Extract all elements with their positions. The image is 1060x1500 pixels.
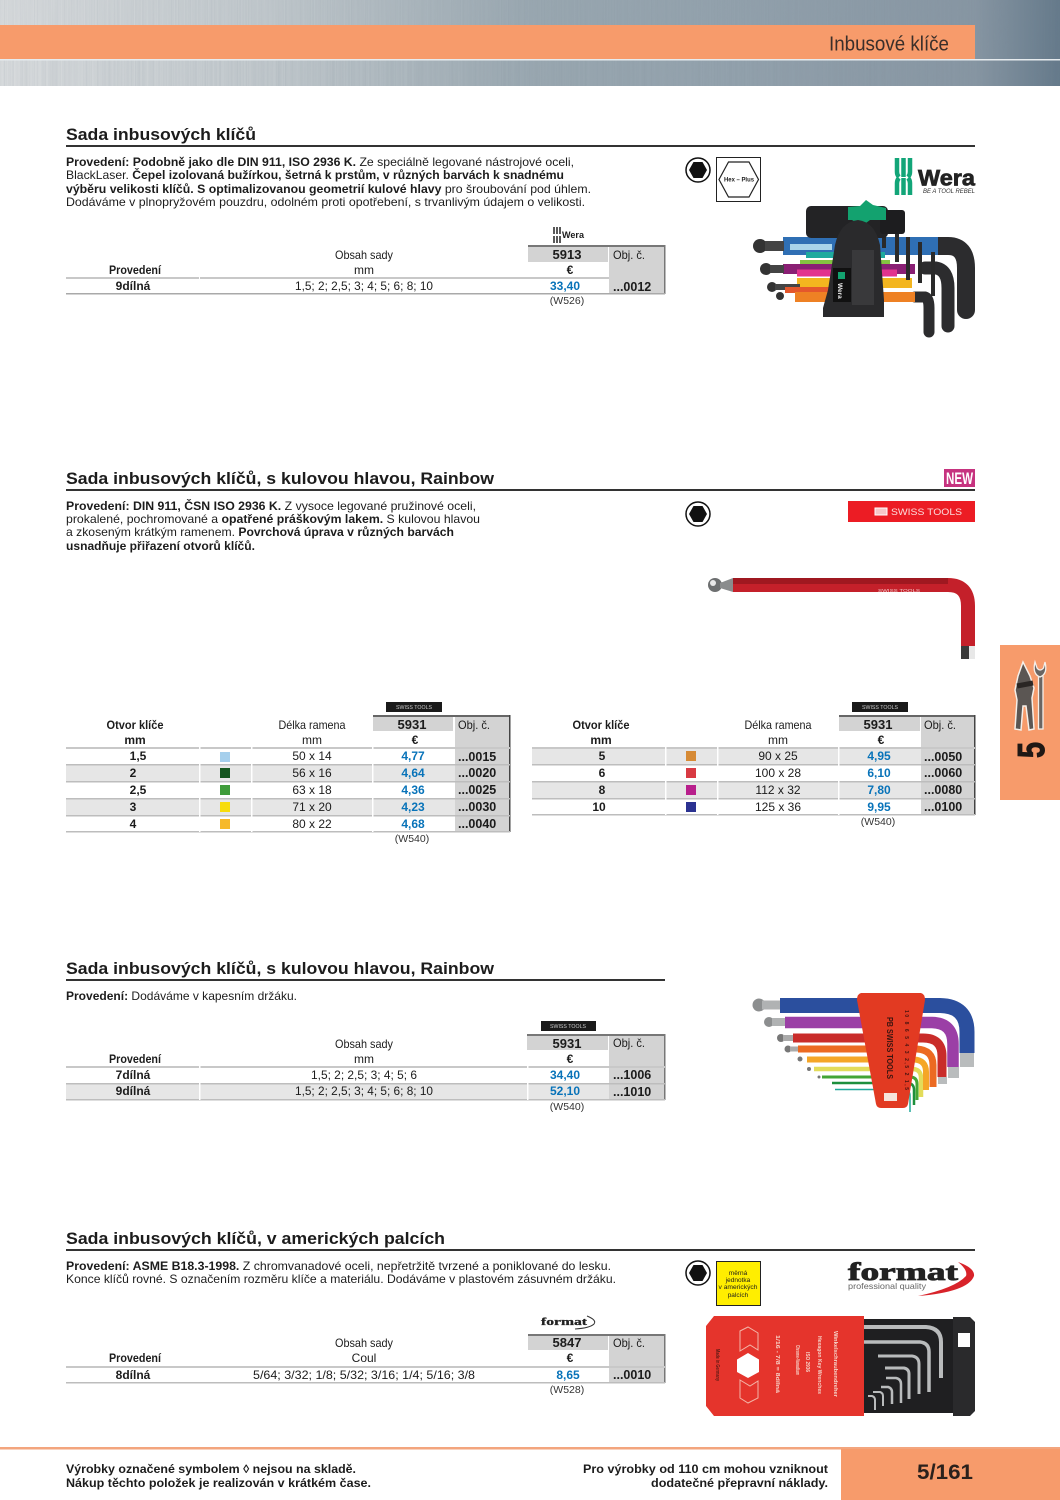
row 8 xyxy=(599,783,962,797)
row 6: 100 x 28 xyxy=(755,766,801,780)
row 9dílná xyxy=(116,1084,651,1099)
row 5: 4,95 xyxy=(867,749,891,763)
product table 3 xyxy=(66,1021,666,1113)
product image: Wera key set: Wera xyxy=(836,283,843,299)
row 7dílná: 1,5; 2; 2,5; 3; 4; 5; 6 xyxy=(311,1068,417,1082)
product table 4 xyxy=(66,1316,666,1396)
row 7dílná: 7dílná xyxy=(116,1068,151,1082)
section 2: kulová hlava Rainbow xyxy=(66,469,976,845)
product table 2 right: mm xyxy=(768,733,788,747)
section 1: Sada inbusových klíčů xyxy=(66,125,976,332)
description: Dodáváme v plnopryžovém pouzdru, odolném proti opotřebení, s trvanlivým údajem o velikosti. xyxy=(66,195,585,209)
icon: american inches note: palcích xyxy=(728,1292,749,1299)
row 8: 112 x 32 xyxy=(755,783,801,797)
product image: rainbow key set in holder: PB SWISS TOOLS xyxy=(885,1017,895,1079)
logo: PB Swiss Tools: SWISS TOOLS xyxy=(891,507,962,518)
product table 4: Obsah sady xyxy=(335,1336,393,1350)
description: Provedení: DIN 911, ČSN ISO 2936 K. Z vysoce legované pružinové oceli, xyxy=(66,498,476,513)
row 2,5: 4,36 xyxy=(401,783,425,797)
icon: american inches note: jednotka xyxy=(725,1277,751,1284)
product table 2 left: € xyxy=(412,733,419,747)
row 3: 71 x 20 xyxy=(292,800,332,814)
row 4: 4 xyxy=(130,817,137,831)
footer note right xyxy=(583,1462,828,1490)
row 3 xyxy=(130,800,496,814)
heading: Sada inbusových klíčů, v amerických palcích xyxy=(66,1229,445,1248)
row 6: 6,10 xyxy=(867,766,891,780)
row 7dílná: 34,40 xyxy=(550,1068,580,1082)
description: BlackLaser. Čepel izolovaná bužírkou, šetrná k prstům, v různých barvách k snadnému xyxy=(66,167,564,182)
row 7dílná: ...1006 xyxy=(613,1068,651,1082)
product table 1: Obj. č. xyxy=(613,248,645,262)
product table 2 left: Délka ramena xyxy=(278,718,346,732)
row 10: 10 xyxy=(592,800,606,814)
product image: red ball-end key xyxy=(708,578,975,659)
footer note right: Pro výrobky od 110 cm mohou vzniknout xyxy=(583,1462,828,1476)
product table 1: 33,40 xyxy=(550,279,580,293)
product table 1: € xyxy=(567,263,574,277)
product table 4: Coul xyxy=(352,1351,376,1365)
description: a zkoseným krátkým ramenem. Povrchová úprava v různých barvách xyxy=(66,525,454,539)
row 9dílná: 9dílná xyxy=(116,1084,151,1098)
row 2 xyxy=(130,766,496,780)
product image: format key set: Hexagon Key Wrenches xyxy=(816,1336,822,1394)
product table 3: Provedení xyxy=(109,1052,162,1066)
product image: rainbow key set in holder: 10 8 6 5 4 3 2,5 2 1,5 xyxy=(903,1010,909,1090)
description: Provedení: ASME B18.3-1998. Z chromvanadové oceli, nepřetržitě tvrzené a poniklované do lesku. xyxy=(66,1259,611,1273)
product table 3: Obsah sady xyxy=(335,1037,393,1051)
header title: Inbusové klíče xyxy=(829,34,949,56)
row 4: ...0040 xyxy=(458,817,496,831)
product image: red ball-end key: SWISS TOOLS xyxy=(878,588,920,593)
product table 4: ...0010 xyxy=(613,1368,651,1382)
row 2: ...0020 xyxy=(458,766,496,780)
row 2: 2 xyxy=(130,766,137,780)
product table 1: mm xyxy=(354,263,374,277)
product image: format key set: ISO 2936 xyxy=(804,1352,810,1372)
product table 4: 5/64; 3/32; 1/8; 5/32; 3/16; 1/4; 5/16; 3/8 xyxy=(253,1368,475,1382)
footer note right: dodatečné přepravní náklady. xyxy=(651,1476,828,1490)
icon: hexagon socket xyxy=(686,158,710,182)
logo: PB small xyxy=(852,702,908,712)
logo: format: professional quality xyxy=(848,1281,927,1291)
row 6: ...0060 xyxy=(924,766,962,780)
icon: hexagon socket xyxy=(686,1261,710,1285)
product image: format key set: Winkelschraubendreher xyxy=(832,1331,838,1397)
row 8: 8 xyxy=(599,783,606,797)
product table 3: € xyxy=(567,1052,574,1066)
row 10: ...0100 xyxy=(924,800,962,814)
row 1,5: 1,5 xyxy=(130,749,147,763)
product table 2 left xyxy=(66,702,510,845)
description xyxy=(66,1259,616,1286)
product table 2 right: € xyxy=(878,733,885,747)
header band xyxy=(0,0,1060,86)
logo: PB small: SWISS TOOLS xyxy=(396,705,433,711)
product table 4: Provedení xyxy=(109,1351,162,1365)
row 2,5: ...0025 xyxy=(458,783,496,797)
heading: Sada inbusových klíčů, s kulovou hlavou, Rainbow xyxy=(66,469,495,488)
row 2: 56 x 16 xyxy=(292,766,332,780)
row 8: 7,80 xyxy=(867,783,891,797)
row 2,5 xyxy=(130,783,496,797)
product table 2 right: (W540) xyxy=(861,816,895,828)
product table 2 right: Otvor klíče xyxy=(572,718,630,732)
product table 1: Obsah sady xyxy=(335,248,393,262)
footer note left: Výrobky označené symbolem ◊ nejsou na skladě. xyxy=(66,1462,356,1476)
section 3: kapesní držák xyxy=(66,959,974,1113)
product table 3: 5931 xyxy=(553,1036,581,1051)
footer note left xyxy=(66,1462,371,1490)
logo: Wera small: Wera xyxy=(562,230,585,240)
large keys xyxy=(937,246,966,310)
logo: Wera small xyxy=(554,227,585,243)
product table 3: mm xyxy=(354,1052,374,1066)
row 5: 90 x 25 xyxy=(758,749,798,763)
product table 2 left: mm xyxy=(124,733,146,747)
row 8: ...0080 xyxy=(924,783,962,797)
product image: Wera key set xyxy=(753,200,966,332)
product table 3: Obj. č. xyxy=(613,1036,645,1050)
description: usnadňuje přiřazení otvorů klíčů. xyxy=(66,539,255,553)
product table 4: € xyxy=(567,1351,574,1365)
row 6: 6 xyxy=(599,766,606,780)
product image: format key set: Chrome-Vanadium xyxy=(794,1345,800,1375)
product table 1: 5913 xyxy=(553,247,581,262)
product table 4: (W528) xyxy=(550,1384,584,1396)
icon: american inches note: měrná xyxy=(729,1270,748,1277)
logo: Wera: Wera xyxy=(918,166,976,190)
page number: 5/161 xyxy=(917,1461,973,1484)
icon: Hex-Plus xyxy=(716,158,760,202)
logo: format small xyxy=(541,1316,595,1329)
holder xyxy=(857,993,925,1108)
description: Konce klíčů rovné. S označením rozměru klíče a materiálu. Dodáváme v plastovém zásuvném držáku. xyxy=(66,1272,616,1286)
icon: pliers and wrench xyxy=(1015,662,1046,730)
row 4 xyxy=(130,817,496,831)
logo: PB small xyxy=(541,1021,596,1031)
row 3: 3 xyxy=(130,800,137,814)
product table 4: 5847 xyxy=(553,1335,581,1350)
row 10 xyxy=(592,800,962,814)
product table 4: Obj. č. xyxy=(613,1336,645,1350)
heading: Sada inbusových klíčů xyxy=(66,125,256,144)
row 9dílná: 52,10 xyxy=(550,1084,580,1098)
row 9dílná: ...1010 xyxy=(613,1085,651,1099)
product table 2 left: mm xyxy=(302,733,322,747)
description: Provedení: Podobně jako dle DIN 911, ISO 2936 K. Ze speciálně legované nástrojové oceli, xyxy=(66,155,574,169)
row 10: 9,95 xyxy=(867,800,891,814)
product table 2 left: Obj. č. xyxy=(458,718,490,732)
logo: PB small: SWISS TOOLS xyxy=(550,1024,587,1030)
product table 2 left: (W540) xyxy=(395,833,429,845)
footer xyxy=(0,1447,1060,1500)
row 7dílná xyxy=(116,1068,651,1082)
product image: rainbow key set in holder xyxy=(752,993,974,1112)
row 10: 125 x 36 xyxy=(755,800,801,814)
badge: NEW xyxy=(944,469,975,488)
product table 2 right: mm xyxy=(590,733,612,747)
product table 1: (W526) xyxy=(550,295,584,307)
row 2,5: 2,5 xyxy=(130,783,147,797)
logo: Wera: BE A TOOL REBEL xyxy=(923,189,975,195)
logo: Wera xyxy=(897,158,976,195)
icon: american inches note: v amerických xyxy=(718,1284,758,1291)
row 1,5: 50 x 14 xyxy=(292,749,332,763)
row 1,5: 4,77 xyxy=(401,749,425,763)
product table 4: 8,65 xyxy=(556,1368,580,1382)
description: prokalené, pochromované a opatřené práškovým lakem. S kulovou hlavou xyxy=(66,512,480,526)
product table 2 right: Délka ramena xyxy=(744,718,812,732)
row 5 xyxy=(599,749,962,764)
icon: american inches note xyxy=(716,1262,760,1306)
row 9dílná: 1,5; 2; 2,5; 3; 4; 5; 6; 8; 10 xyxy=(295,1084,433,1098)
product table 3: (W540) xyxy=(550,1101,584,1113)
description: Provedení: Dodáváme v kapesním držáku. xyxy=(66,989,297,1003)
section tab 5 xyxy=(1000,645,1060,800)
product table 1: Provedení xyxy=(109,263,162,277)
row 5: 5 xyxy=(599,749,606,763)
logo: format xyxy=(848,1259,974,1296)
row 1,5 xyxy=(130,749,496,764)
tab number: 5 xyxy=(1011,742,1053,758)
logo: format: format xyxy=(848,1259,959,1286)
product table 2 left: 5931 xyxy=(398,717,426,732)
description xyxy=(66,498,480,553)
row 5: ...0050 xyxy=(924,750,962,764)
icon: hexagon socket xyxy=(686,502,710,526)
row 1,5: ...0015 xyxy=(458,750,496,764)
row 3: 4,23 xyxy=(401,800,425,814)
row 4: 80 x 22 xyxy=(292,817,332,831)
footer note left: Nákup těchto položek je realizován v krátkém čase. xyxy=(66,1476,371,1490)
row 2: 4,64 xyxy=(401,766,425,780)
product table 1: 1,5; 2; 2,5; 3; 4; 5; 6; 8; 10 xyxy=(295,279,433,293)
small key tips xyxy=(884,225,933,296)
product image: format key set xyxy=(706,1316,975,1416)
logo: PB Swiss Tools xyxy=(848,501,975,522)
logo: PB small xyxy=(386,702,442,712)
description xyxy=(66,155,591,209)
product table 2 right xyxy=(532,702,976,828)
logo: PB small: SWISS TOOLS xyxy=(862,705,899,711)
product image: format key set: Made in Germany xyxy=(714,1349,720,1381)
heading: Sada inbusových klíčů, s kulovou hlavou, Rainbow xyxy=(66,959,495,978)
badge: NEW: NEW xyxy=(946,469,974,488)
holder xyxy=(806,206,888,238)
logo: format small: format xyxy=(541,1316,587,1328)
product table 2 right: 5931 xyxy=(864,717,892,732)
row 3: ...0030 xyxy=(458,800,496,814)
row 2,5: 63 x 18 xyxy=(292,783,332,797)
description: výběru velikosti klíčů. S optimalizovanou geometrií kulové hlavy pro šroubování pod úhlem. xyxy=(66,182,591,196)
product image: format key set: 1/16 - 7/8 = 8dílná xyxy=(774,1335,780,1393)
product table 1 xyxy=(66,227,666,307)
page number xyxy=(841,1449,1060,1500)
product table 4: 8dílná xyxy=(116,1368,151,1382)
row 6 xyxy=(599,766,962,780)
product table 2 left: Otvor klíče xyxy=(106,718,164,732)
product table 1: 9dílná xyxy=(116,279,151,293)
icon: Hex-Plus: Hex – Plus xyxy=(724,176,754,184)
product table 2 right: Obj. č. xyxy=(924,718,956,732)
section 4: americké palce xyxy=(66,1229,975,1416)
row 4: 4,68 xyxy=(401,817,425,831)
product table 1: ...0012 xyxy=(613,280,651,294)
